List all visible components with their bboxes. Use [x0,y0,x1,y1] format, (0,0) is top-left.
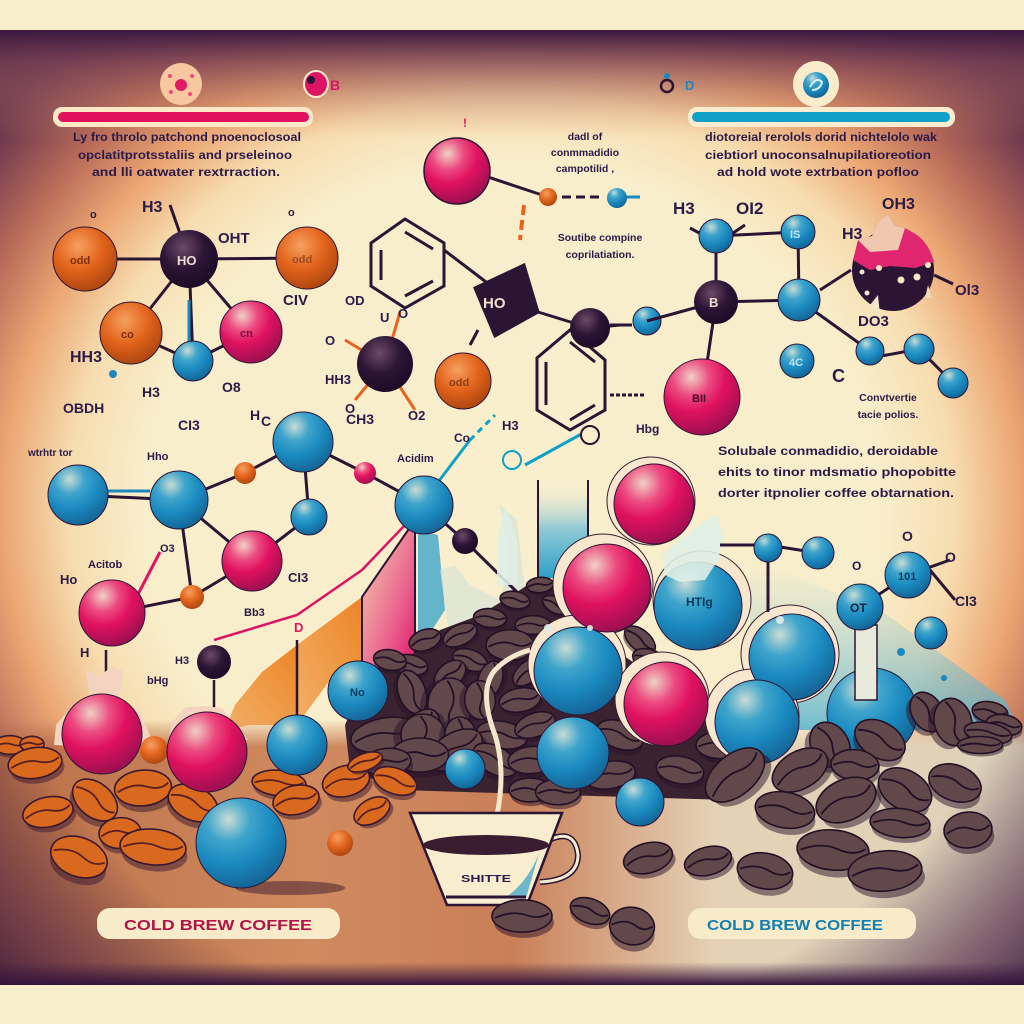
stipple panel: center blue area [538,480,588,578]
molecule: upper left cluster: O8 [222,379,241,395]
molecule: upper left cluster: HO [177,253,196,268]
icon: right small molecule [661,73,694,93]
molecule: middle network: bHg [147,675,168,687]
left header bar [53,107,313,127]
molecule: top pink atom and bond: ! [463,116,467,130]
left description text: Ly fro throlo patchond pnoenoclosoal [73,132,301,144]
molecule: upper left cluster: o [90,209,97,221]
molecule: small dark atom [325,293,425,423]
molecule: middle network: H3 [502,418,519,433]
icon: right header badge [793,61,839,107]
molecule: lower right atoms [720,528,977,700]
molecule: middle network: H [250,407,260,423]
molecule: small dark atom: OD [345,293,364,308]
coffee beans: left orange scattered [0,736,422,892]
coffee beans: right scattered [565,686,1024,955]
fizz: rising bubbles [497,505,784,632]
molecule: ring structure center [371,219,645,430]
molecule: middle network: Acitob [88,559,122,571]
stipple column: blue fizz [418,530,445,680]
icon: fizzing pink and dark sphere: H3 [842,226,863,243]
ground [0,720,1024,985]
molecule: upper left cluster: H3 [142,384,160,400]
right caption: soluble compounds [718,444,956,500]
molecule: middle network: Bb3 [244,607,265,619]
molecule: middle network: Hho [147,451,169,463]
molecule: upper left cluster: OBDH [63,400,104,416]
icon: left header badge [160,63,202,105]
right caption: soluble compounds: dorter itpnolier coffee obtarnation. [718,486,954,500]
molecule: lower right atoms: Cl3 [955,593,977,609]
spheres: lower pink and blue atoms: No [350,687,365,699]
coffee bean: in front of cup [492,900,554,938]
molecule: lower right atoms: O [945,549,956,565]
coffee bean pile [345,576,746,809]
molecule: middle network: Acidim [397,453,434,465]
right caption: soluble compounds: ehits to tinor mdsmatio phopobitte [718,465,956,479]
spheres: lower pink and blue atoms [62,464,917,895]
molecule: middle network: O3 [160,543,175,555]
molecule: right cluster: C [832,366,845,386]
molecule: lower right atoms: O [852,559,861,573]
icon: left small pink molecule [304,71,340,97]
left description text: opclatitprotsstaliis and prseleinoo [78,150,292,162]
molecule: middle network: wtrhtr tor [27,448,73,459]
molecule: lower right atoms: 101 [898,571,916,583]
molecule: right cluster: BII [692,393,706,405]
cup label: SHITTE [461,874,511,885]
molecule: upper left cluster: OHT [218,230,250,247]
center caption: soluble compound [558,232,642,261]
molecule: middle network: C [261,413,271,429]
molecule: right cluster: IS [790,229,800,241]
right caption: soluble compounds: Solubale conmadidio, deroidable [718,444,938,458]
molecule: right cluster: B [709,295,718,310]
molecule: upper left cluster: HH3 [70,349,102,366]
stipple wash: right pale blue area [750,560,1020,730]
molecule: top pink atom and bond [424,116,640,240]
right description text [705,132,938,179]
molecule: right cluster: DO3 [858,313,889,330]
molecule: lower right atoms: O [902,528,913,544]
left description text [73,132,301,179]
icon: left small pink molecule: B [330,77,340,93]
molecule: middle network: H [80,645,89,660]
molecule: upper left cluster: odd [292,254,312,266]
steam above cup [486,650,530,815]
fizz halos behind lower spheres [54,457,839,763]
spheres: lower pink and blue atoms: HTIg [686,595,713,609]
center caption: soluble compound: Soutibe compine [558,232,642,244]
molecule: upper left cluster: H3 [142,199,163,216]
center caption: soluble compound: coprilatiation. [566,249,635,261]
right caption: taste profile: tacie polios. [858,409,918,421]
right header bar [688,107,955,127]
stipple fizz: pale bubbles [440,505,530,640]
molecule: middle network: D [294,620,303,635]
right description text: ciebtiorl unoconsalnupilatioreotion [705,150,931,162]
molecule: upper left cluster: CI3 [178,417,200,433]
left description text: and lli oatwater rextrraction. [92,167,280,179]
molecule: small dark atom: O [345,401,355,416]
center caption: compounds: dadl of [568,131,603,143]
label: left cold brew coffee: COLD BREW COFFEE [124,917,312,934]
right caption: taste profile [858,392,918,421]
molecule: right cluster: OI2 [736,199,763,218]
molecule: middle network: H3 [175,655,189,667]
molecule: middle network [27,407,659,715]
coffee cup [410,813,578,905]
icon: fizzing pink and dark sphere [820,196,979,315]
molecule: middle network: Hbg [636,422,659,436]
molecule: small dark atom: U [380,310,389,325]
atoms: ring side atoms: odd [449,377,469,389]
molecule: middle network: CH3 [346,411,374,427]
molecule: upper left cluster [53,199,338,433]
stipple wedge: orange area [225,645,297,730]
molecule: middle network: Ho [60,572,77,587]
molecule: right cluster [647,199,968,435]
icon: fizzing pink and dark sphere: OH3 [882,196,915,213]
molecule: upper left cluster: co [121,329,134,341]
molecule: upper left cluster: CIV [283,292,308,309]
right caption: taste profile: Convtvertie [859,392,917,404]
icon: fizzing pink and dark sphere: Ol3 [955,282,979,299]
center caption: compounds [551,131,619,175]
molecule: small dark atom: O [325,333,335,348]
right description text: ad hold wote extrbation pofloo [717,167,919,179]
molecule: lower right atoms: OT [850,601,867,615]
label: ring centre: HO [483,295,506,312]
stipple wedge: pink rising area [362,520,415,672]
label: left cold brew coffee [97,908,340,939]
center caption: compounds: campotilid , [556,163,614,175]
molecule: upper left cluster: odd [70,255,90,267]
label: right cold brew coffee: COLD BREW COFFEE [707,917,883,934]
molecule: middle network: CI3 [288,570,308,585]
molecule: small dark atom: O2 [408,408,425,423]
molecule: right cluster: H3 [673,199,695,218]
molecule: upper left cluster: cn [240,328,253,340]
atoms: ring side atoms [435,307,661,409]
molecule: upper left cluster: o [288,207,295,219]
molecule: small dark atom: O [398,306,408,321]
center caption: compounds: conmmadidio [551,147,619,159]
label: right cold brew coffee [688,908,916,939]
icon: right small molecule: D [685,78,694,93]
molecule: small dark atom: HH3 [325,372,351,387]
right description text: diotoreial rerolols dorid nichtelolo wak [705,132,938,144]
stipple wedge: orange middle area [297,597,362,725]
molecule: right cluster: 4C [789,357,803,369]
molecule: middle network: Co [454,431,470,445]
